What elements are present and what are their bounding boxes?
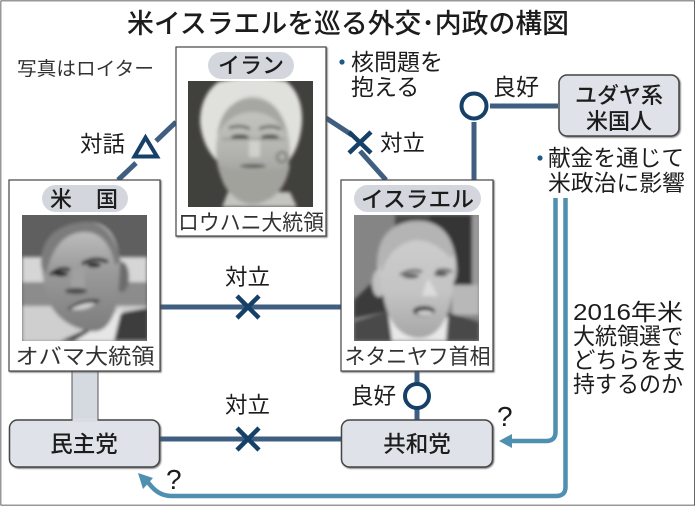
box: Republicans xyxy=(342,420,492,467)
box: Republicans: 共和党 xyxy=(383,432,451,457)
connector: Israel to Republicans xyxy=(414,371,420,420)
panel: Iran xyxy=(176,47,326,236)
connector: US to Democrats xyxy=(72,371,98,422)
caption: Obama: オバマ大統領 xyxy=(16,345,154,369)
connector: Democrats vs Republicans xyxy=(160,436,341,442)
icon: circle, Israel and Republicans xyxy=(405,384,429,408)
box: Jewish Americans: ユダヤ系 xyxy=(575,83,663,108)
bullet note: donations xyxy=(537,146,685,196)
icon: cross, Iran vs Israel xyxy=(349,132,371,153)
connector: Iran to Israel, conflict xyxy=(326,118,386,180)
connector: Israel to Jewish Americans xyxy=(474,106,558,180)
icon: triangle, dialogue xyxy=(134,138,157,156)
label: conflict, Democrats vs Republicans: 対立 xyxy=(225,393,270,418)
arrow: to Democrats xyxy=(138,198,566,496)
box: Democrats: 民主党 xyxy=(50,432,118,457)
photo credit: 写真はロイター xyxy=(17,58,154,80)
note: 2016 election question: 2016年米 xyxy=(573,299,683,325)
pill: United States: 米 xyxy=(50,187,72,212)
connector: US vs Israel xyxy=(160,304,341,310)
panel: United States xyxy=(9,180,160,371)
connector: US to Iran, dialogue xyxy=(118,122,176,180)
note: 2016 election question: どちらを支 xyxy=(573,347,685,373)
box: Jewish Americans: 米国人 xyxy=(586,109,652,134)
caption: Netanyahu: ネタニヤフ首相 xyxy=(344,345,490,369)
bullet note: donations: 米政治に影響 xyxy=(548,171,685,196)
arrow: to Republicans xyxy=(499,198,556,448)
pill: United States xyxy=(42,185,128,212)
photo: Obama xyxy=(22,215,147,342)
photo: Rouhani xyxy=(188,78,313,207)
note: 2016 election question xyxy=(573,299,685,397)
pill: United States: 国 xyxy=(96,187,118,212)
note: 2016 election question: 持するのか xyxy=(573,371,683,397)
label: conflict, Iran vs Israel: 対立 xyxy=(380,131,425,156)
label: good relations, Republicans: 良好 xyxy=(351,384,396,409)
bullet note: nuclear issue: 抱える xyxy=(351,74,419,100)
pill: Israel: イスラエル xyxy=(361,187,474,212)
icon: cross, Democrats vs Republicans xyxy=(237,428,259,450)
question mark: Republicans: ? xyxy=(497,401,513,432)
bullet note: nuclear issue xyxy=(339,49,443,100)
question mark: Democrats: ? xyxy=(166,464,182,495)
icon: cross, US vs Israel xyxy=(237,296,259,318)
bullet note: donations: 献金を通じて xyxy=(548,146,684,171)
box: Democrats xyxy=(10,418,160,467)
panel: Israel xyxy=(341,180,493,371)
photo: Netanyahu xyxy=(354,215,480,341)
label: conflict, US vs Israel: 対立 xyxy=(225,265,270,290)
label: good relations, Jewish Americans: 良好 xyxy=(493,74,539,100)
icon: circle, Israel and Jewish Americans xyxy=(462,94,486,118)
label: dialogue: 対話 xyxy=(80,132,125,157)
bullet note: nuclear issue: 核問題を xyxy=(351,49,443,75)
caption: Rouhani: ロウハニ大統領 xyxy=(178,211,324,235)
title: 米イスラエルを巡る外交･内政の構図 xyxy=(127,9,569,39)
pill: Iran: イラン xyxy=(218,53,284,78)
box: Jewish Americans xyxy=(559,75,679,136)
note: 2016 election question: 大統領選で xyxy=(573,323,683,349)
